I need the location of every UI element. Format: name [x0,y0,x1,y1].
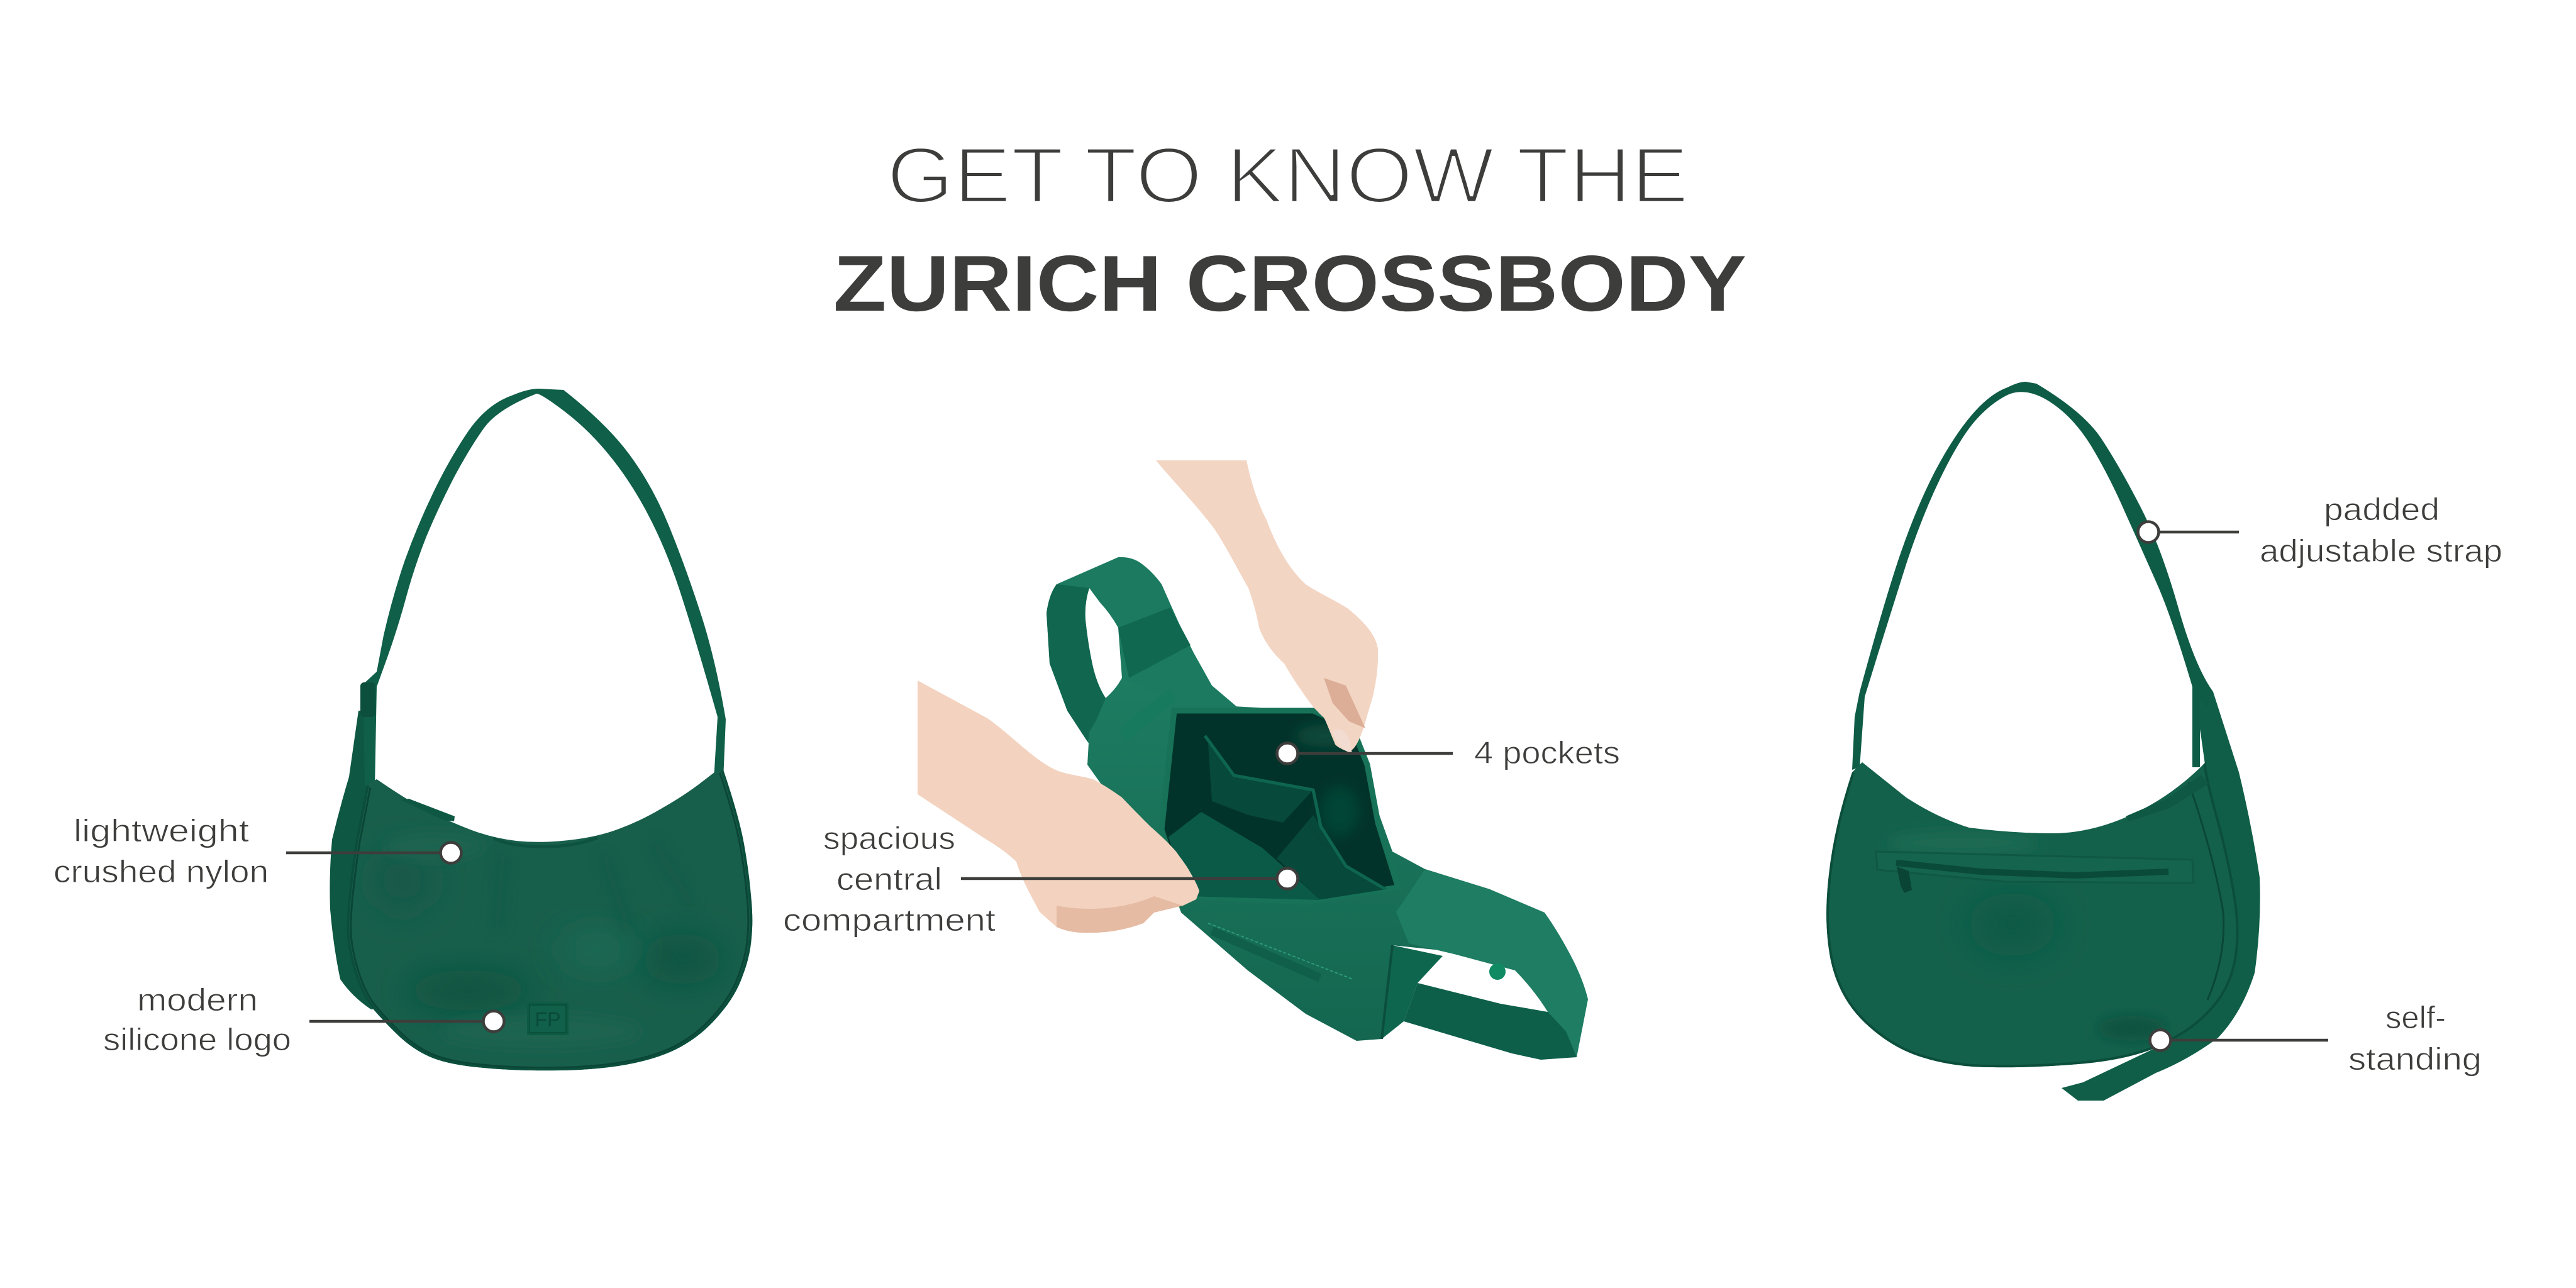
side seam [1382,945,1392,1039]
right pocket [1277,815,1389,900]
zipper pocket [1876,852,2194,883]
title line 2: ZURICH CROSSBODY [833,239,1746,328]
strap button [1489,963,1506,980]
label line 2: crushed nylon [53,854,269,889]
label line 2: silicone logo [103,1022,291,1057]
label line 3: compartment [783,902,996,938]
pocket edge [1205,736,1389,891]
zip puller [1118,689,1176,742]
fabric shading [1826,762,2239,1067]
interior panels [1169,724,1389,900]
silicone logo patch [527,1002,569,1035]
marker [2150,1030,2171,1050]
marker [1277,743,1298,763]
leader [2170,1039,2328,1041]
marker [2138,522,2158,542]
nail [1333,729,1352,753]
leader [286,852,441,854]
bag body [1826,762,2239,1067]
zip tab at top [2126,775,2209,821]
silicone logo patch: FP [535,1008,560,1031]
interior opening [1162,711,1398,902]
fabric shading [347,770,752,1070]
label: padded [2324,492,2440,527]
callout: padded adjustable strap [2138,492,2502,569]
title [833,131,1746,328]
callout: lightweight crushed nylon [53,813,462,889]
label: modern [137,982,258,1018]
side gusset [1382,945,1443,1039]
upper arm and hand [1156,460,1378,752]
shoulder strap [1852,382,2213,770]
outer pocket stitching [1208,923,1353,979]
callout: self-standing [2150,1000,2482,1077]
upper end strap [1396,869,1588,1057]
ruffled pocket [1208,743,1313,823]
label line 2: standing [2348,1041,2482,1077]
callout: spacious central compartment [783,821,1298,938]
left bag, front view [330,389,752,1070]
lower lining [1169,812,1320,900]
zipper teeth [1896,863,2168,875]
label line 2: adjustable strap [2260,533,2502,569]
center image: hands opening bag [918,460,1588,1060]
marker [1277,868,1298,889]
callout: 4 pockets [1277,735,1620,770]
leader [2158,531,2239,533]
marker [440,843,462,863]
marker [483,1011,504,1031]
right glow [1321,786,1358,836]
strap buckle [360,682,375,717]
bag outer body [1087,678,1490,1041]
zipper puller [1897,867,1912,893]
shoulder strap [360,389,726,786]
leader [1297,752,1453,755]
lower hand shadow [1057,896,1183,933]
label: 4 pockets [1474,735,1620,770]
label: spacious [823,821,955,856]
callout: modern silicone logo [103,982,504,1057]
upper strap loop [1046,557,1237,758]
bag body [347,770,752,1070]
label: self- [2385,1000,2446,1035]
lower arm and hand [918,680,1199,933]
lower strap [1404,983,1577,1060]
zipper tab [401,799,455,821]
finger shadow [1324,678,1365,728]
title line 1: GET TO KNOW THE [887,131,1689,219]
strap underside [1046,584,1106,741]
right bag, back view [1826,382,2260,1101]
leader [309,1020,484,1023]
label: lightweight [74,813,249,848]
outer pocket zip [1212,931,1320,978]
long strap tail [2062,692,2260,1101]
leader [961,877,1278,880]
back strap [330,711,402,1009]
label line 2: central [836,862,942,897]
top glow [1296,724,1358,747]
strap band patch [1118,608,1191,678]
